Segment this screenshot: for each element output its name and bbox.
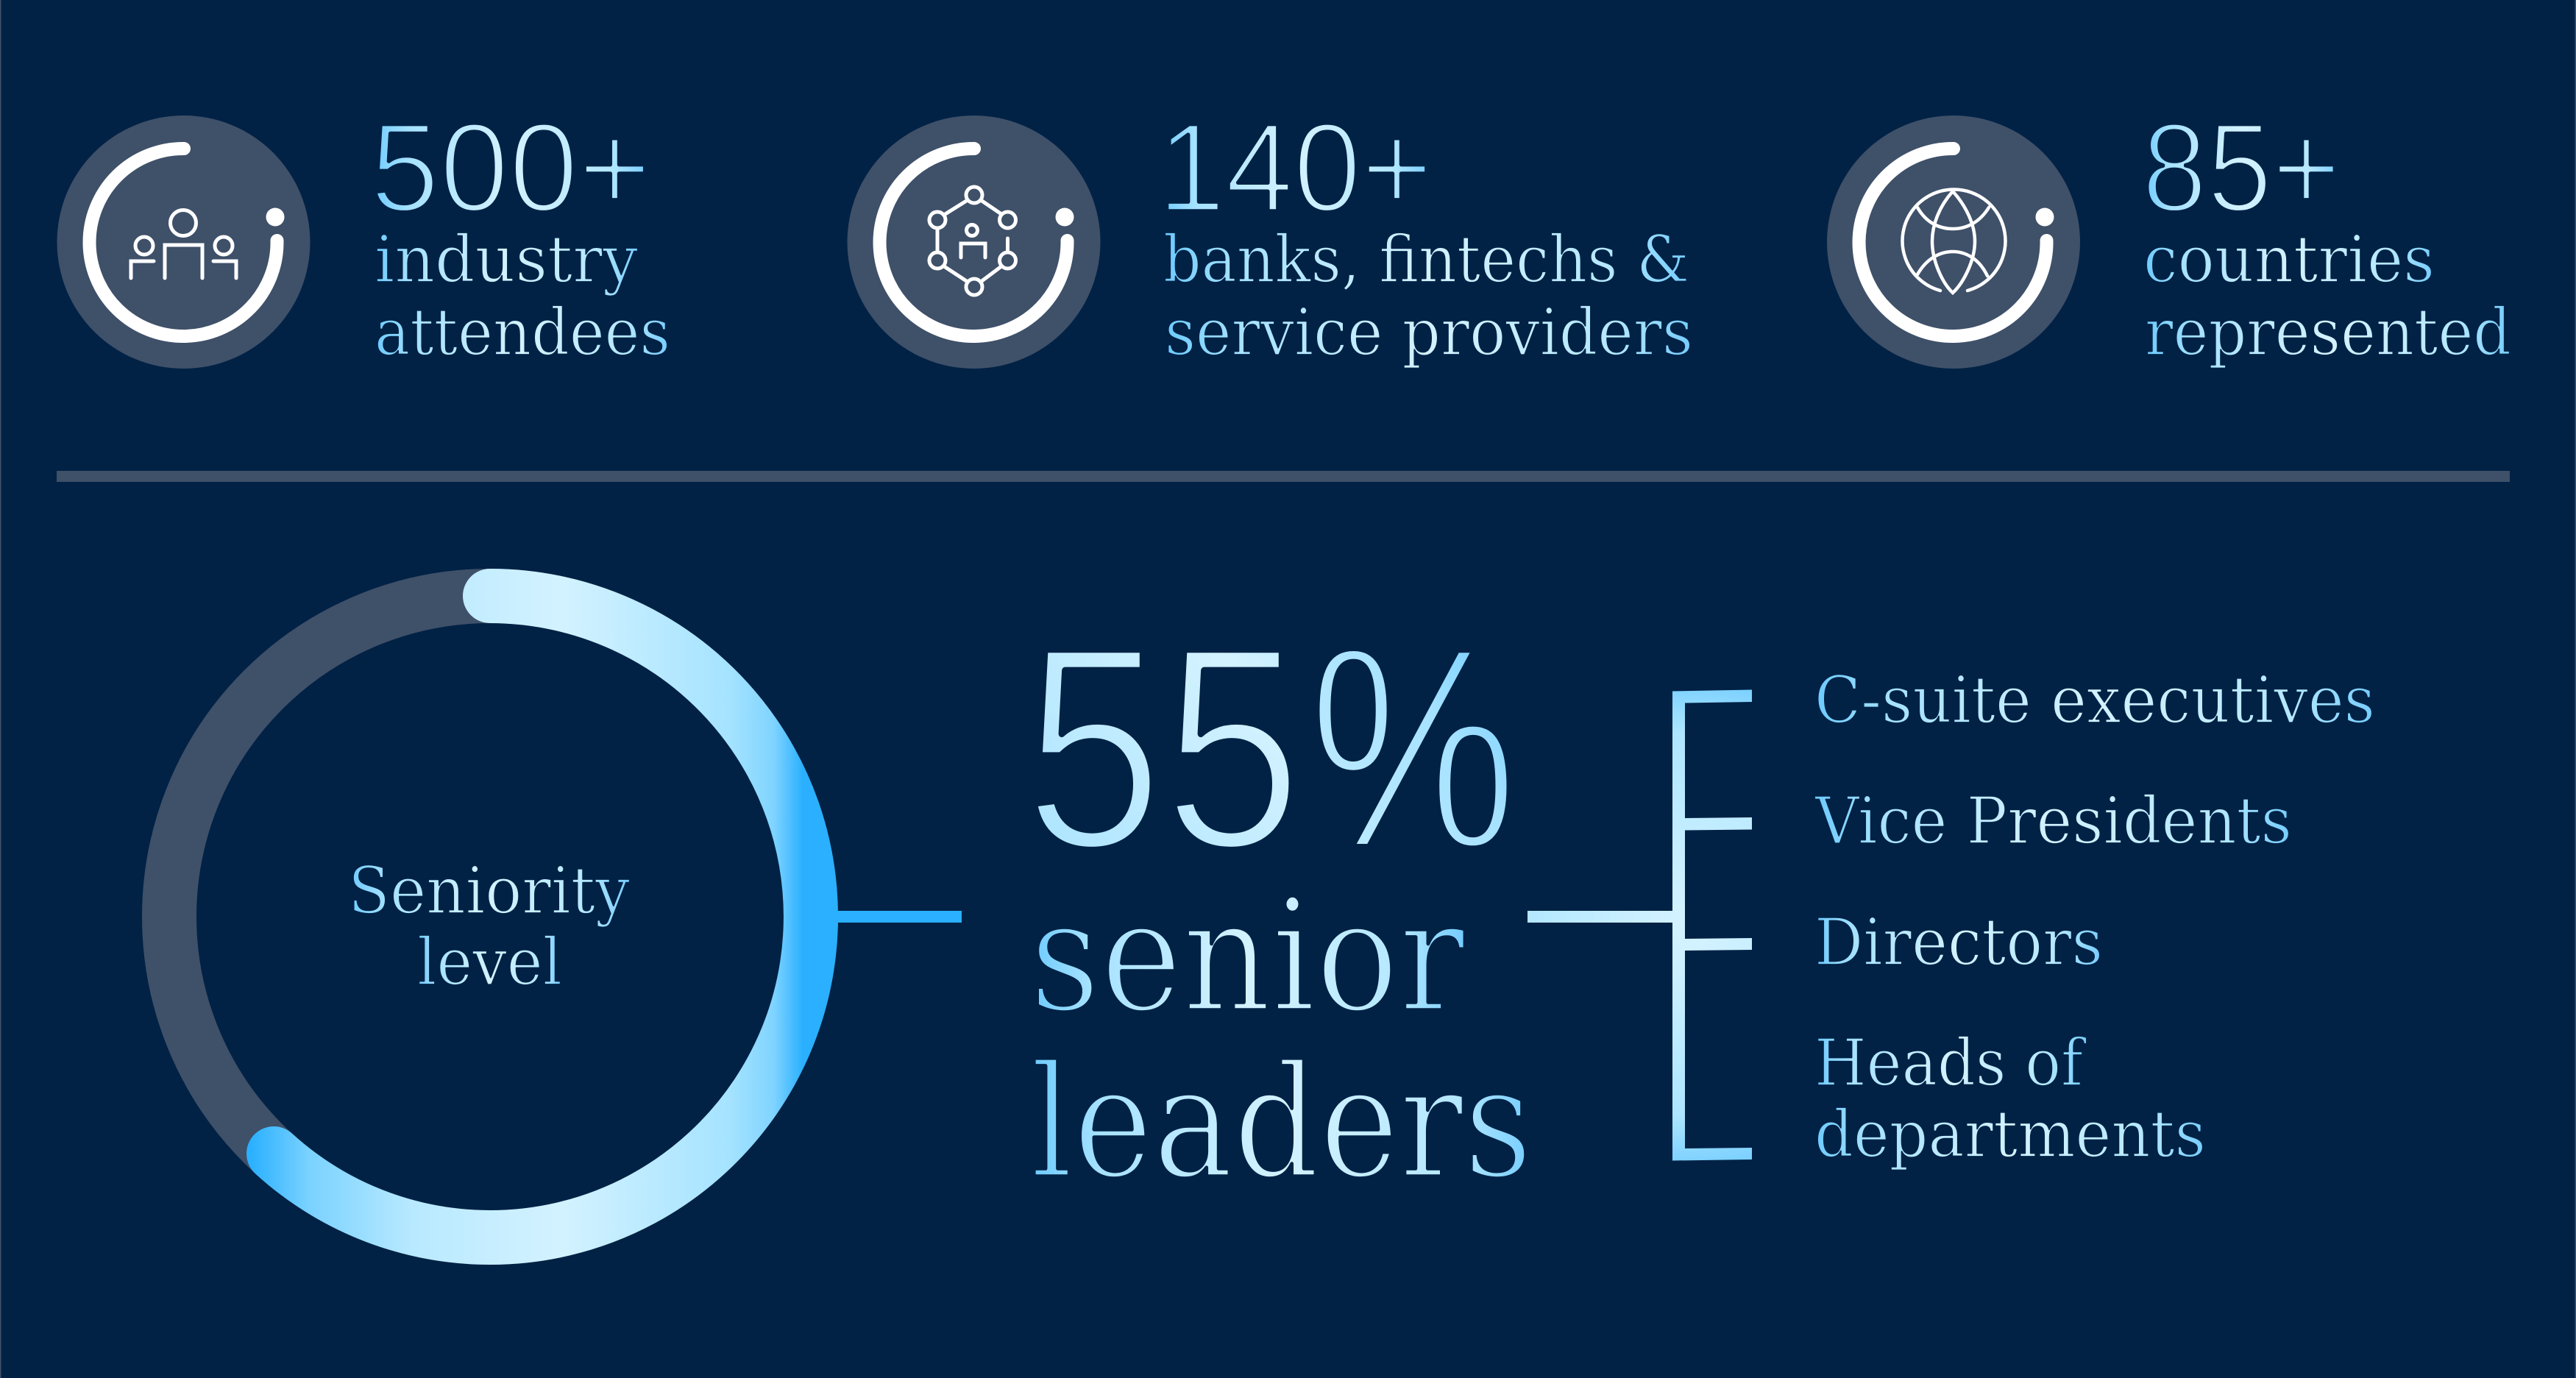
icon: people in progress ring xyxy=(57,116,311,369)
label: industry attendees xyxy=(375,221,670,370)
number: 55% xyxy=(1024,587,1518,909)
list: senior roles: Vice Presidents xyxy=(1814,783,2292,859)
label: countries represented xyxy=(2143,221,2511,370)
label: industry attendees: industry xyxy=(375,221,638,297)
label: seniority level: Seniority xyxy=(348,853,630,928)
label: banks, fintechs and service providers: service providers xyxy=(1165,294,1693,370)
list: senior roles: departments xyxy=(1814,1096,2206,1172)
bracket connector xyxy=(1527,690,1752,1161)
list: senior roles: Directors xyxy=(1814,904,2103,980)
number: 140+: 140+ xyxy=(1157,97,1433,238)
label: seniority level xyxy=(348,853,630,1000)
number: 500+: 500+ xyxy=(370,97,651,238)
stat: 500+ industry attendees xyxy=(57,97,670,370)
icon: globe in progress ring xyxy=(1827,116,2080,369)
heading: senior leaders: senior xyxy=(1029,865,1466,1047)
chart: seniority donut ring xyxy=(169,596,962,1237)
label: industry attendees: attendees xyxy=(375,294,670,370)
heading: senior leaders xyxy=(1029,865,1533,1213)
list: senior roles xyxy=(1814,662,2375,1172)
number: 85+: 85+ xyxy=(2142,97,2341,238)
stat: 85+ countries represented xyxy=(1827,97,2511,370)
number: 55%: 55 xyxy=(1024,587,1302,909)
label: countries represented: represented xyxy=(2145,294,2511,370)
label: countries represented: countries xyxy=(2143,221,2435,297)
list: senior roles: C-suite executives xyxy=(1814,662,2375,738)
label: banks, fintechs and service providers xyxy=(1163,221,1693,370)
label: banks, fintechs and service providers: banks, fintechs & xyxy=(1163,221,1689,297)
heading: senior leaders: leaders xyxy=(1030,1031,1533,1213)
list: senior roles: Heads of xyxy=(1814,1025,2087,1101)
stat: 140+ banks, fintechs and service providers xyxy=(848,97,1693,370)
icon: network in progress ring xyxy=(848,116,1101,369)
label: seniority level: level xyxy=(417,924,562,1000)
number: 55%: % xyxy=(1308,587,1518,909)
